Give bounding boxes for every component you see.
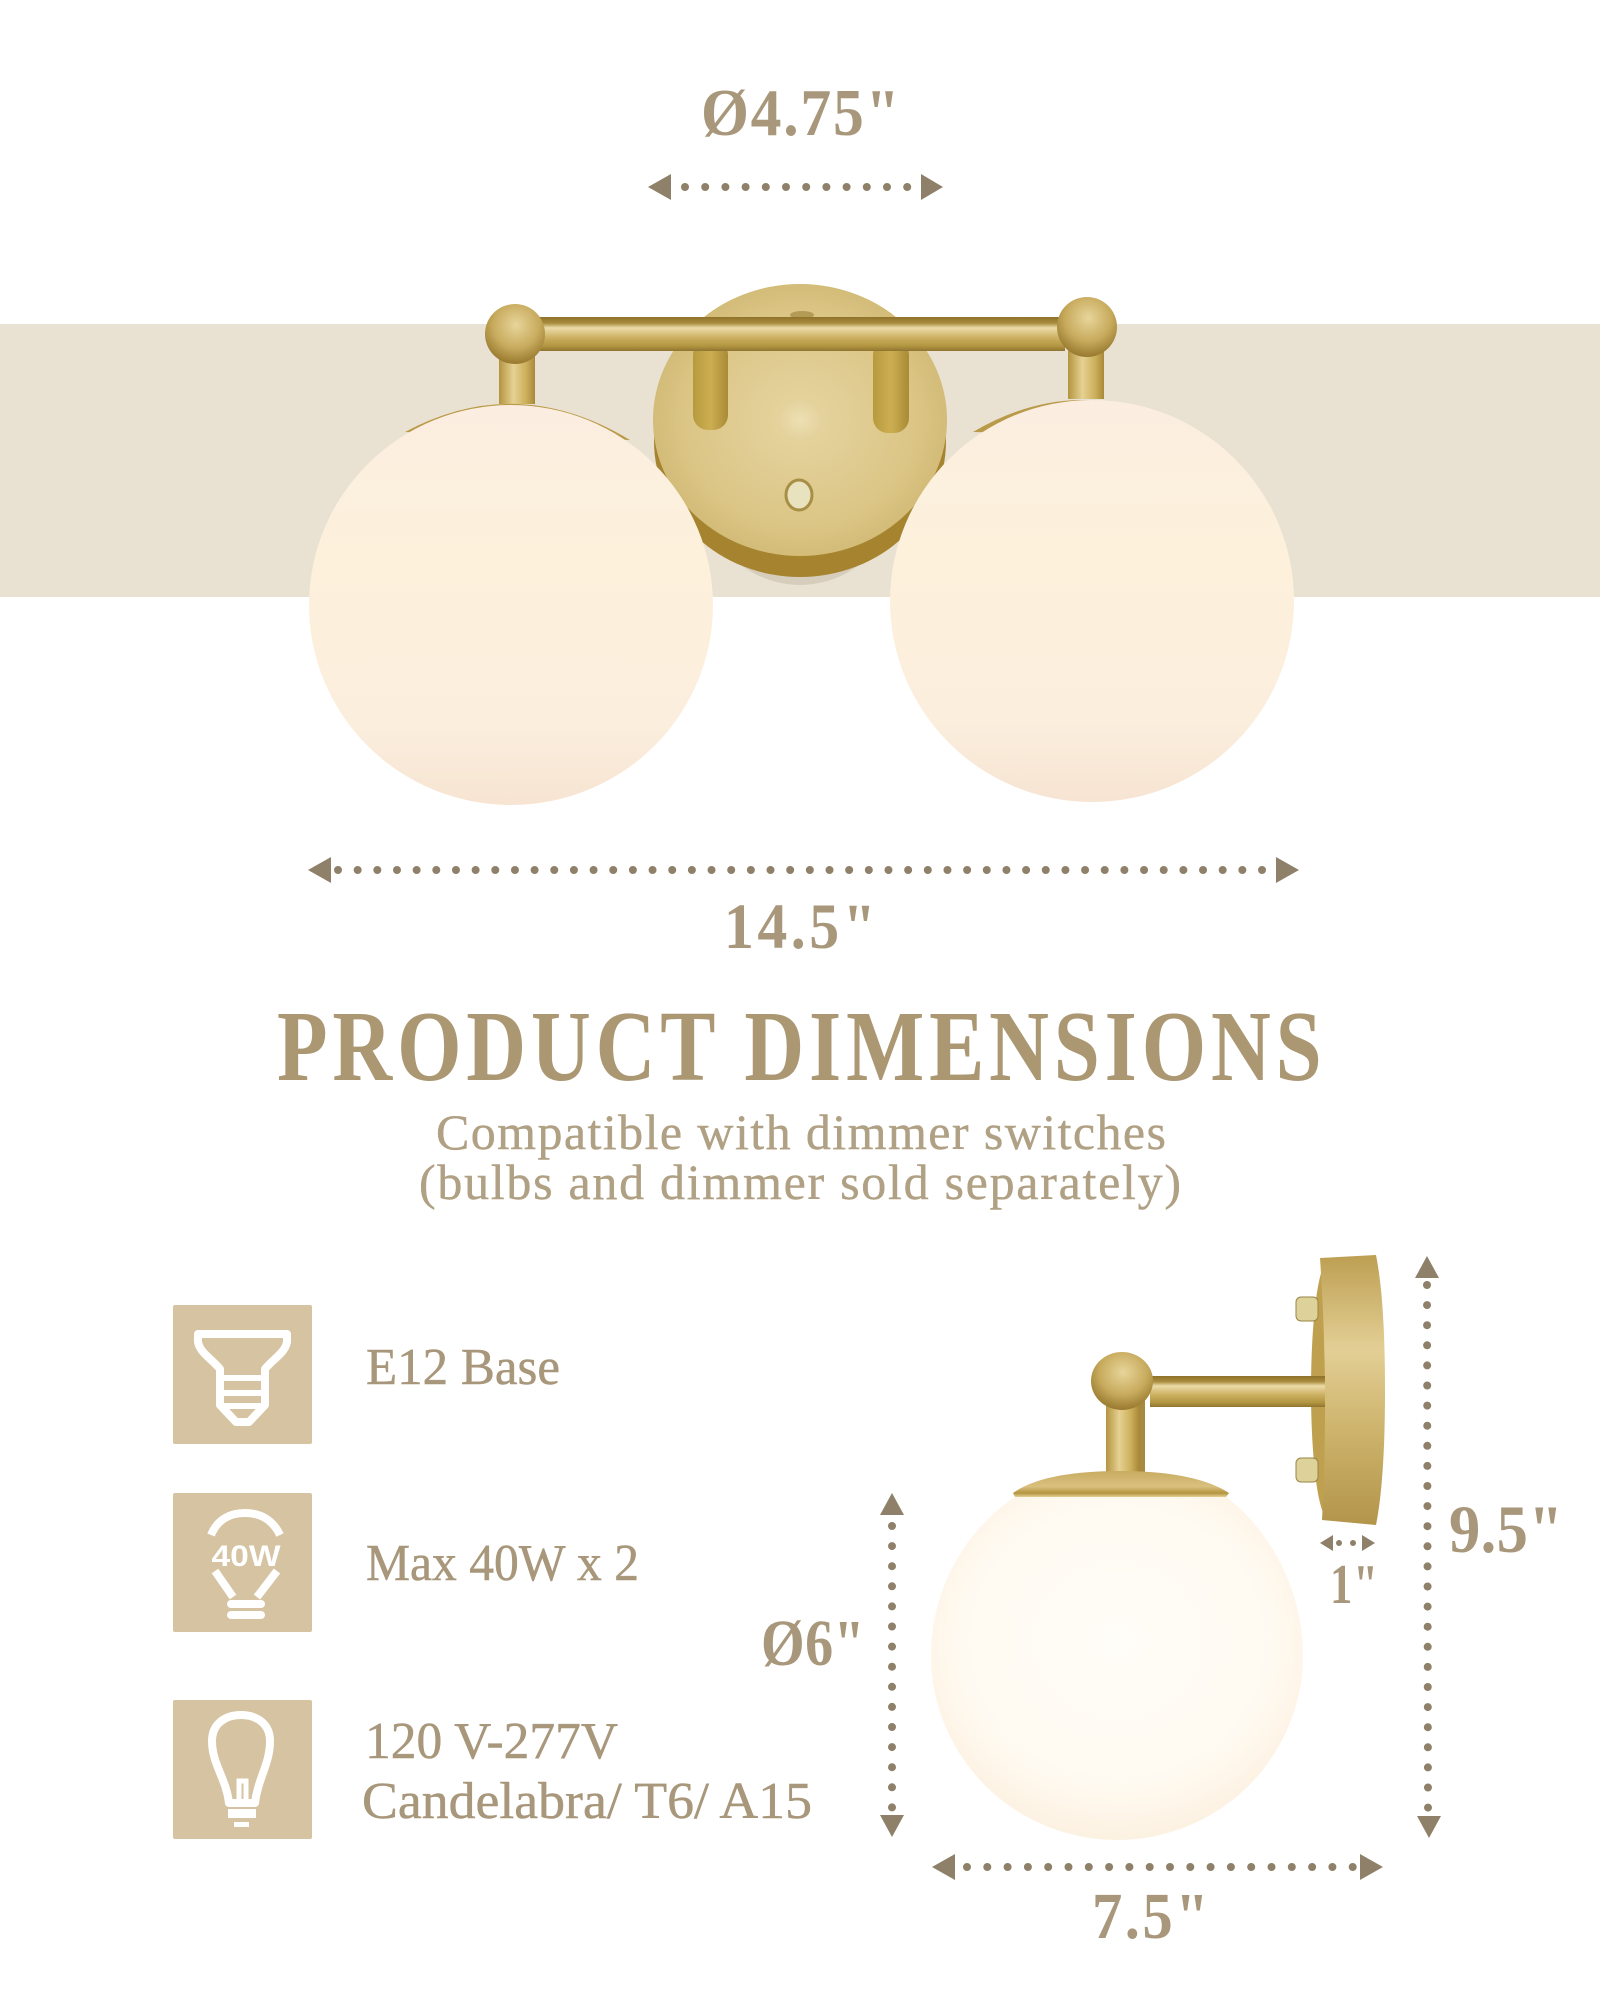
dimension: projection 7.5 inch: 7.5" xyxy=(1092,1879,1209,1953)
dimension: shade width 4.75 inch: Ø4.75" xyxy=(701,76,900,150)
dimension: shade width 4.75 inch xyxy=(648,76,943,200)
left glass globe xyxy=(309,405,713,805)
side view fixture xyxy=(931,1255,1385,1840)
icon: max 40W bulb xyxy=(173,1493,312,1632)
icon: E12 base xyxy=(173,1305,312,1444)
dimension: projection 7.5 inch xyxy=(932,1854,1383,1953)
left ball joint xyxy=(485,304,545,364)
dimension: plate depth 1 inch: 1" xyxy=(1330,1553,1378,1615)
right glass globe xyxy=(890,400,1294,802)
label: Max 40W x 2: Max 40W x 2 xyxy=(366,1535,639,1592)
icon: max 40W bulb: 40W xyxy=(212,1540,281,1573)
dimension: plate depth 1 inch xyxy=(1320,1535,1378,1615)
two-globe vanity light fixture xyxy=(309,284,1294,805)
side wall plate xyxy=(1296,1255,1385,1525)
dimension: total width 14.5 inch: 14.5" xyxy=(724,890,876,963)
wall plate xyxy=(653,284,947,585)
subtitle: (bulbs and dimmer sold separately) xyxy=(419,1154,1181,1210)
label: voltage and bulb types: Candelabra/ T6/ A15 xyxy=(362,1773,812,1830)
side cap xyxy=(1013,1471,1229,1497)
dimension: globe diameter 6 inch xyxy=(761,1493,904,1837)
side glass globe xyxy=(931,1497,1303,1840)
dimension: height 9.5 inch xyxy=(1415,1256,1563,1838)
right ball joint xyxy=(1057,297,1117,357)
title: PRODUCT DIMENSIONS xyxy=(277,990,1322,1102)
beige background band xyxy=(0,324,1600,597)
label: voltage and bulb types: 120 V-277V xyxy=(365,1713,618,1770)
side ball joint xyxy=(1091,1352,1153,1410)
label: voltage and bulb types xyxy=(362,1713,812,1830)
subtitle: Compatible with dimmer switches xyxy=(436,1104,1166,1160)
dimension: height 9.5 inch: 9.5" xyxy=(1449,1493,1563,1568)
dimension: globe diameter 6 inch: Ø6" xyxy=(761,1607,865,1680)
icon: candelabra bulb xyxy=(173,1700,312,1839)
side arm xyxy=(1150,1376,1325,1407)
crossbar xyxy=(535,317,1065,351)
label: E12 Base: E12 Base xyxy=(366,1339,560,1396)
right stem and cap xyxy=(973,345,1202,436)
dimension: total width 14.5 inch xyxy=(308,857,1299,963)
subtitle xyxy=(419,1104,1181,1210)
side stem xyxy=(1106,1400,1145,1474)
left stem and cap xyxy=(405,350,630,440)
